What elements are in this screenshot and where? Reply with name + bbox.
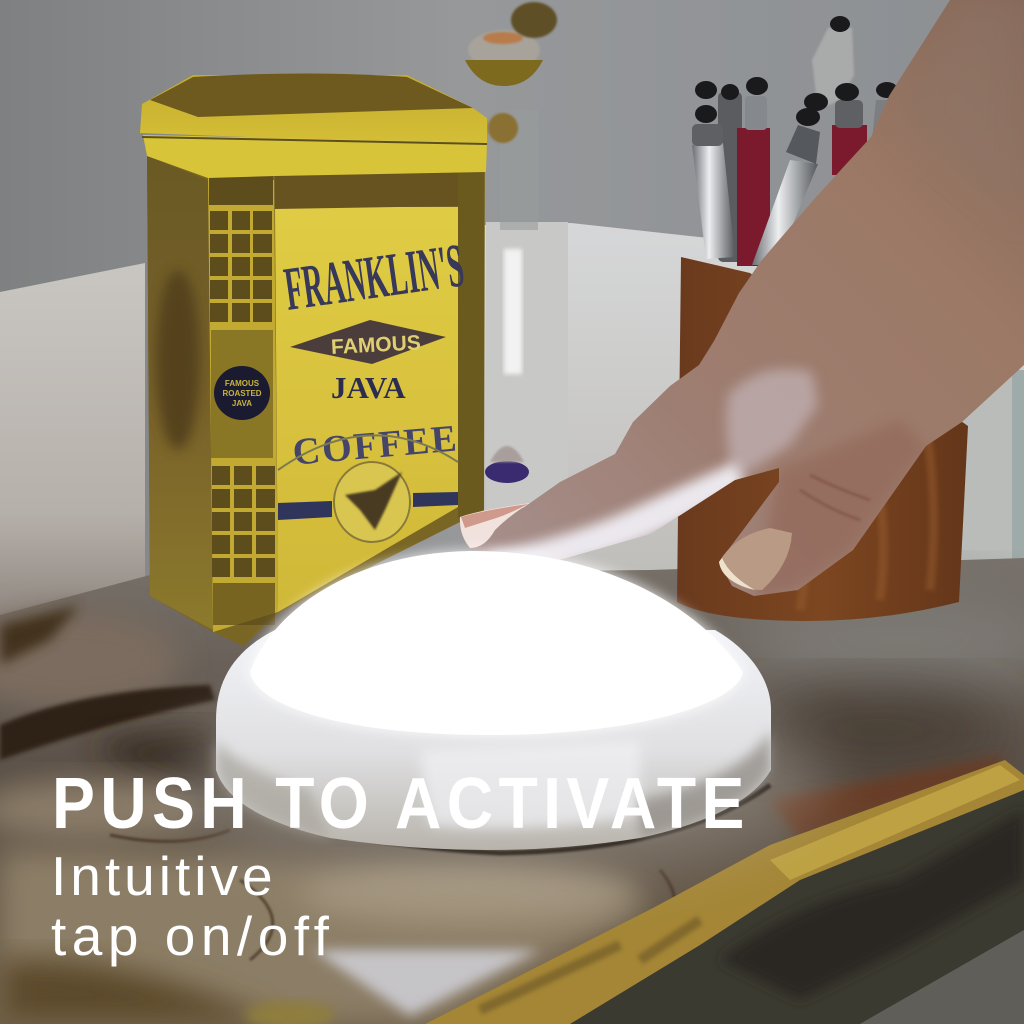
counter front edge [425, 760, 1024, 1024]
tin badge: ROASTED [222, 389, 262, 398]
tin lid [140, 75, 487, 142]
marble counter [0, 558, 1024, 1024]
coffee tin [140, 74, 487, 646]
knuckle highlight [726, 369, 818, 480]
tin coffee lettering: COFFEE [291, 417, 460, 474]
glass thermometer [465, 2, 568, 512]
lamp right shade [640, 730, 771, 838]
subheading: tap on/off [51, 905, 334, 967]
tin brand lettering: FRANKLIN'S [281, 232, 468, 324]
subheading: Intuitive [51, 845, 277, 907]
lamp left shade [216, 740, 330, 838]
hand and finger shape [459, 0, 1024, 596]
tin front label [275, 207, 470, 612]
subheading [51, 845, 334, 967]
lamp glare on counter [313, 950, 540, 1016]
heading: PUSH TO ACTIVATE [52, 764, 750, 844]
lamp base [216, 630, 771, 850]
tin badge [214, 366, 270, 420]
tin left side panel [147, 156, 213, 630]
lamp base bright band [420, 740, 640, 828]
tin arc line [278, 435, 458, 470]
thumb nail [719, 528, 792, 590]
tin right column [458, 165, 484, 518]
wrist shading [900, 0, 1024, 220]
tin half pound tags [278, 501, 332, 520]
tin collar [143, 135, 487, 178]
fingernail [460, 503, 530, 548]
lamp dome [250, 551, 743, 735]
tin pattern column [208, 178, 278, 632]
pens [692, 16, 898, 266]
thumb shading [754, 420, 926, 600]
tin body [147, 145, 485, 646]
tin badge: FAMOUS [225, 379, 260, 388]
tin banner [290, 320, 446, 364]
finger underside glow [490, 462, 745, 565]
coffee tin: FAMOUS [330, 331, 421, 359]
lamp contact shadow [235, 785, 770, 853]
lamp dome glow [247, 550, 745, 737]
tin top frieze [275, 172, 458, 209]
tin java lettering: JAVA [331, 370, 406, 405]
push light [216, 550, 771, 853]
thumb knuckle crease [800, 475, 870, 520]
lamp glow on counter [165, 680, 825, 880]
tin eagle medallion [334, 462, 410, 542]
hand [459, 0, 1024, 600]
wooden pen holder [677, 257, 968, 621]
tin badge: JAVA [232, 399, 252, 408]
